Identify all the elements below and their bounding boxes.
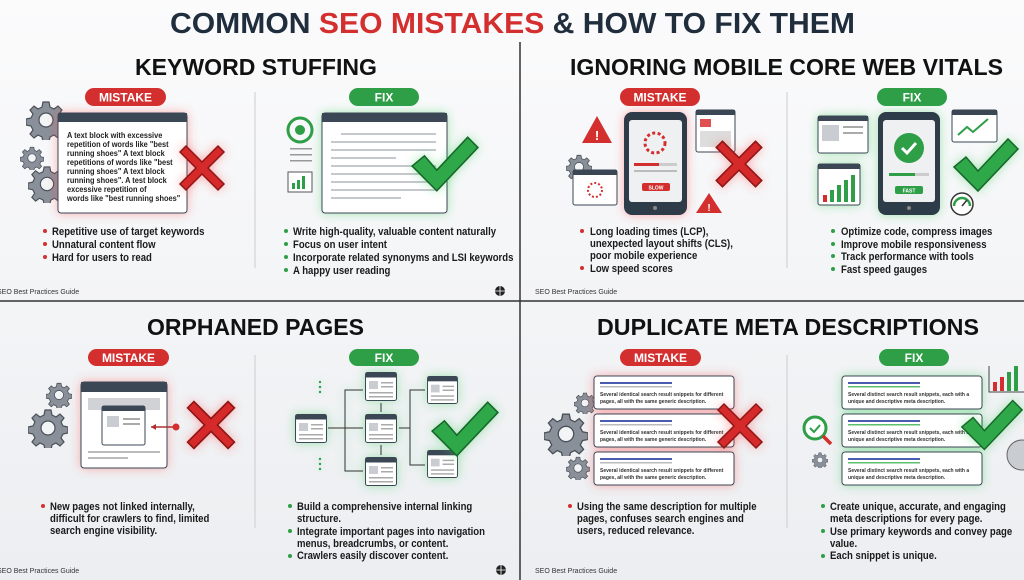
fix window	[322, 113, 447, 213]
mistake bullets: users, reduced relevance.	[577, 525, 695, 537]
fix bullets: Track performance with tools	[841, 251, 974, 263]
panel: mobile core web vitals	[535, 54, 1018, 296]
icon: gears	[544, 393, 596, 481]
icon: bar chart	[989, 366, 1024, 392]
small error window	[696, 110, 735, 152]
icon: warnings and gear: !	[595, 128, 599, 143]
footer: SEO Best Practices Guide	[535, 568, 617, 575]
mistake window with stuffed text: A text block with excessive	[67, 131, 163, 140]
icon: magnifier	[804, 417, 831, 469]
mistake snippets: Several identical search result snippets for different	[600, 468, 724, 474]
fix bullets: Build a comprehensive internal linking	[297, 501, 472, 513]
mistake window with stuffed text: repetition of words like "best	[67, 140, 169, 149]
mistake window with stuffed text: running shoes". A test block	[67, 176, 167, 185]
mistake bullets	[41, 501, 209, 537]
heading: keyword stuffing: KEYWORD STUFFING	[135, 54, 377, 80]
icon: green check	[412, 137, 478, 191]
mistake pill	[620, 88, 700, 106]
mistake phone	[624, 112, 687, 215]
mistake phone: SLOW	[648, 186, 664, 192]
icon: gears	[20, 102, 66, 205]
heading: IGNORING MOBILE CORE WEB VITALS	[570, 54, 1003, 80]
mistake pill	[620, 349, 701, 366]
fix pill: FIX	[375, 90, 393, 104]
heading: ORPHANED PAGES	[147, 314, 364, 340]
mistake pill: MISTAKE	[99, 90, 152, 104]
mistake pill	[85, 88, 166, 106]
mistake bullets: Unnatural content flow	[52, 239, 156, 251]
mistake bullets: Repetitive use of target keywords	[52, 226, 205, 238]
fix snippets	[842, 376, 982, 485]
footer: SEO Best Practices Guide	[535, 289, 617, 296]
fix pill	[879, 349, 949, 366]
fix bullets: Fast speed gauges	[841, 264, 927, 276]
fix bullets: Optimize code, compress images	[841, 226, 993, 238]
fix pill	[349, 88, 419, 106]
fix bullets: meta descriptions for every page.	[830, 513, 983, 525]
fix pill	[349, 349, 419, 366]
fix bullets: Focus on user intent	[293, 239, 388, 251]
mistake snippets: pages, all with the same generic description.	[600, 437, 707, 443]
fix bullets	[284, 226, 514, 277]
fix bullets: A happy user reading	[293, 265, 390, 277]
heading: DUPLICATE META DESCRIPTIONS	[597, 314, 979, 340]
mistake bullets: Low speed scores	[590, 263, 673, 275]
arrow: blocked link	[151, 424, 180, 430]
icon: green check	[962, 400, 1022, 450]
icon: green check	[954, 139, 1018, 191]
mistake pill	[88, 349, 169, 366]
mistake snippets: pages, all with the same generic description.	[600, 399, 707, 405]
icon: red x	[180, 146, 224, 190]
icon: globe	[495, 286, 505, 296]
icon: gauge	[951, 193, 973, 215]
mistake window with stuffed text	[58, 113, 187, 213]
mistake window with stuffed text: words like "best running shoes"	[66, 194, 180, 203]
mistake bullets: search engine visibility.	[50, 525, 157, 537]
fix bullets: menus, breadcrumbs, or content.	[297, 538, 448, 550]
mistake snippets: Several identical search result snippets for different	[600, 430, 724, 436]
icon: gears	[28, 383, 72, 450]
fix pill: FIX	[905, 351, 923, 365]
mistake bullets	[568, 501, 757, 537]
fix: internal link tree	[296, 372, 457, 486]
fix pill: FIX	[903, 90, 921, 104]
fix bullets: structure.	[297, 513, 341, 525]
icon: red x	[188, 402, 234, 448]
fix bullets: Crawlers easily discover content.	[297, 550, 449, 562]
trend window	[952, 110, 997, 142]
mistake snippets: pages, all with the same generic description.	[600, 475, 707, 481]
mistake pill: MISTAKE	[633, 90, 687, 104]
mistake bullets: Long loading times (LCP),	[590, 226, 709, 238]
mistake bullets: New pages not linked internally,	[50, 501, 195, 513]
fix windows	[818, 116, 868, 205]
icon: red x	[718, 404, 762, 448]
fix bullets	[821, 501, 1012, 562]
icon: warnings and gear	[566, 116, 722, 214]
small slow window	[573, 170, 617, 205]
fix bullets: Write high-quality, valuable content naturally	[293, 226, 496, 238]
fix snippets: unique and descriptive meta description.	[848, 475, 946, 481]
mistake bullets: difficult for crawlers to find, limited	[50, 513, 209, 525]
fix bullets: Each snippet is unique.	[830, 550, 937, 562]
fix bullets: Improve mobile responsiveness	[841, 239, 987, 251]
fix bullets	[288, 501, 485, 562]
fix bullets	[831, 226, 993, 276]
icon: green check	[432, 402, 498, 456]
title: COMMON SEO MISTAKES & HOW TO FIX THEM	[170, 8, 855, 40]
fix pill: FIX	[375, 351, 393, 365]
fix snippets: Several distinct search result snippets, each with a	[848, 430, 969, 436]
mistake bullets: Using the same description for multiple	[577, 501, 757, 513]
fix bullets: Incorporate related synonyms and LSI keywords	[293, 252, 514, 264]
icon: globe	[496, 565, 506, 575]
fix phone: FAST	[903, 188, 915, 194]
panel: orphaned pages	[0, 314, 506, 575]
icon: warnings and gear: !	[707, 203, 711, 214]
fix snippets: Several distinct search result snippets, each with a	[848, 468, 969, 474]
mistake window with stuffed text: excessive repetition of	[67, 185, 147, 194]
mistake pill: MISTAKE	[102, 351, 155, 365]
mistake window with stuffed text: running shoes" A text block	[67, 167, 165, 176]
mistake bullets	[43, 226, 205, 264]
fix snippets: unique and descriptive meta description.	[848, 437, 946, 443]
panel: keyword stuffing	[0, 54, 514, 296]
fix bullets: Integrate important pages into navigation	[297, 526, 485, 538]
mistake window with stuffed text: running shoes" A text block	[67, 149, 165, 158]
icon: pie	[1007, 440, 1024, 470]
fix bullets: Create unique, accurate, and engaging	[830, 501, 1006, 513]
fix snippets: unique and descriptive meta description.	[848, 399, 946, 405]
mistake bullets: unexpected layout shifts (CLS),	[590, 238, 733, 250]
mistake pill: MISTAKE	[634, 351, 687, 365]
fix phone	[878, 112, 940, 215]
mistake snippets: Several identical search result snippets for different	[600, 392, 724, 398]
panel: duplicate meta descriptions	[535, 314, 1024, 575]
orphan page window	[81, 382, 167, 468]
mistake bullets	[580, 226, 733, 275]
mistake bullets: pages, confuses search engines and	[577, 513, 744, 525]
icon: target and chart	[288, 118, 312, 192]
mistake bullets: Hard for users to read	[52, 252, 152, 264]
mistake window with stuffed text: repetitions of words like "best	[67, 158, 173, 167]
fix pill	[877, 88, 947, 106]
icon: red x	[716, 141, 762, 187]
mistake bullets: poor mobile experience	[590, 250, 698, 262]
fix snippets: Several distinct search result snippets, each with a	[848, 392, 969, 398]
fix bullets: Use primary keywords and convey page	[830, 526, 1012, 538]
fix bullets: value.	[830, 538, 857, 550]
mistake snippets	[594, 376, 734, 485]
